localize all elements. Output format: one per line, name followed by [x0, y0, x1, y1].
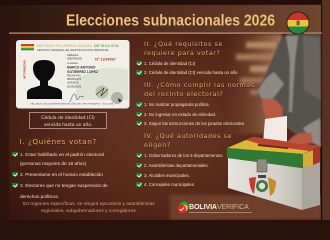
heading IV: IV. ¿Qué autoridades se	[144, 132, 232, 140]
lid side	[303, 150, 313, 168]
voter illustration and ballot box	[227, 34, 322, 210]
coat of arms	[249, 175, 276, 196]
heading II	[144, 40, 223, 57]
logo underline	[189, 211, 252, 214]
item I.1 continued: (personas mayores de 18 años)	[20, 160, 86, 166]
lid front	[227, 148, 303, 168]
card data: CÉDULA	[67, 52, 78, 57]
card data: MARCO ANTONIO	[67, 66, 96, 70]
box front	[228, 158, 302, 210]
card data: NOMBRES	[67, 63, 79, 65]
card data: Nº 1234567	[95, 56, 117, 62]
lower hand	[287, 133, 313, 148]
id card	[16, 40, 130, 108]
box side	[302, 162, 320, 210]
caption box	[29, 112, 107, 129]
item III.2: 2. No ingresar en estado de ebriedad.	[144, 112, 216, 116]
card data: VIGENCIA	[67, 82, 79, 84]
logo: Bolivia Verifica	[177, 201, 252, 214]
card data: VÁLIDA TODA LA REPRESENTACIÓN DEL PROPIETARIO · BOLIVIA	[30, 102, 114, 106]
item IV.2: 2. Asambleístas departamentales.	[144, 162, 209, 168]
item IV.3: 3. Alcaldes municipales.	[144, 172, 190, 178]
caption box: Cédula de identidad (CI)	[41, 116, 95, 120]
item IV.1: 1. Gobernadores de los 9 departamentos.	[144, 152, 224, 158]
logo icon	[177, 201, 189, 214]
card side label: INTERMEDIO	[22, 60, 26, 79]
heading I: I. ¿Quiénes votan?	[20, 137, 97, 146]
section III	[136, 81, 255, 126]
card subheading: SERVICIO GENERAL DE IDENTIFICACIÓN PERSONAL	[37, 47, 110, 52]
item III.3: 3. Seguir las instrucciones de los jurados electorales.	[144, 120, 245, 126]
footnote	[23, 202, 155, 214]
card flag	[21, 44, 34, 50]
lid top	[227, 137, 320, 154]
card data: 20/09/2029	[67, 84, 81, 88]
caption box: vencida hasta un año.	[44, 122, 92, 128]
card data: IDENTIDAD	[67, 56, 82, 60]
icon: Bolivia flag circle	[286, 11, 310, 34]
item II.1: 1. Cédula de identidad (CI)	[144, 60, 195, 66]
card data	[30, 52, 117, 106]
heading III: del recinto electoral?	[144, 90, 223, 98]
heading II: requiere para votar?	[144, 49, 220, 57]
item III.1: 1. No realizar propaganda política.	[144, 102, 210, 107]
signature and seals	[70, 86, 123, 104]
card data: FECHA NAC.	[67, 74, 82, 78]
footnote: regionales, subgobernadores y corregidores.	[41, 208, 137, 214]
heading III	[144, 81, 255, 98]
card data: 08/03/1975	[67, 77, 81, 81]
ballot paper	[263, 116, 287, 147]
clasp	[257, 159, 267, 172]
card data: GUTIÉRREZ LÓPEZ	[67, 69, 98, 74]
item I.3 continued: derechos políticos.	[20, 194, 59, 198]
item II.2: 2. Cédula de identidad (CI) vencida hasta un año	[144, 70, 237, 75]
footnote: En regiones específicas, se elegirá ejecutivos y asambleístas	[23, 202, 155, 206]
heading IV: eligen?	[144, 141, 171, 149]
ballot box	[227, 137, 320, 210]
card heading: ESTADO PLURINACIONAL DE BOLIVIA	[37, 43, 119, 48]
logo wordmark: BOLIVIAVERIFICA	[189, 203, 249, 211]
item I.1: 1. Estar habilitado en el padrón electoral	[20, 152, 104, 156]
upper hand	[262, 98, 283, 122]
heading IV	[144, 132, 232, 149]
section II	[136, 40, 238, 75]
section IV	[136, 132, 232, 187]
portrait silhouette	[27, 60, 62, 99]
item IV.4: 4. Concejales municipales.	[144, 182, 195, 187]
voter in grey hoodie	[258, 34, 321, 147]
item I.2: 2. Presentarse en el horario establecido	[20, 172, 103, 176]
section I	[12, 137, 108, 199]
item I.3: 3. Electores que no tengan suspensión de	[20, 182, 108, 188]
heading II: II. ¿Qué requisitos se	[144, 40, 223, 48]
heading III: III. ¿Cómo cumplir las normas	[144, 81, 255, 89]
